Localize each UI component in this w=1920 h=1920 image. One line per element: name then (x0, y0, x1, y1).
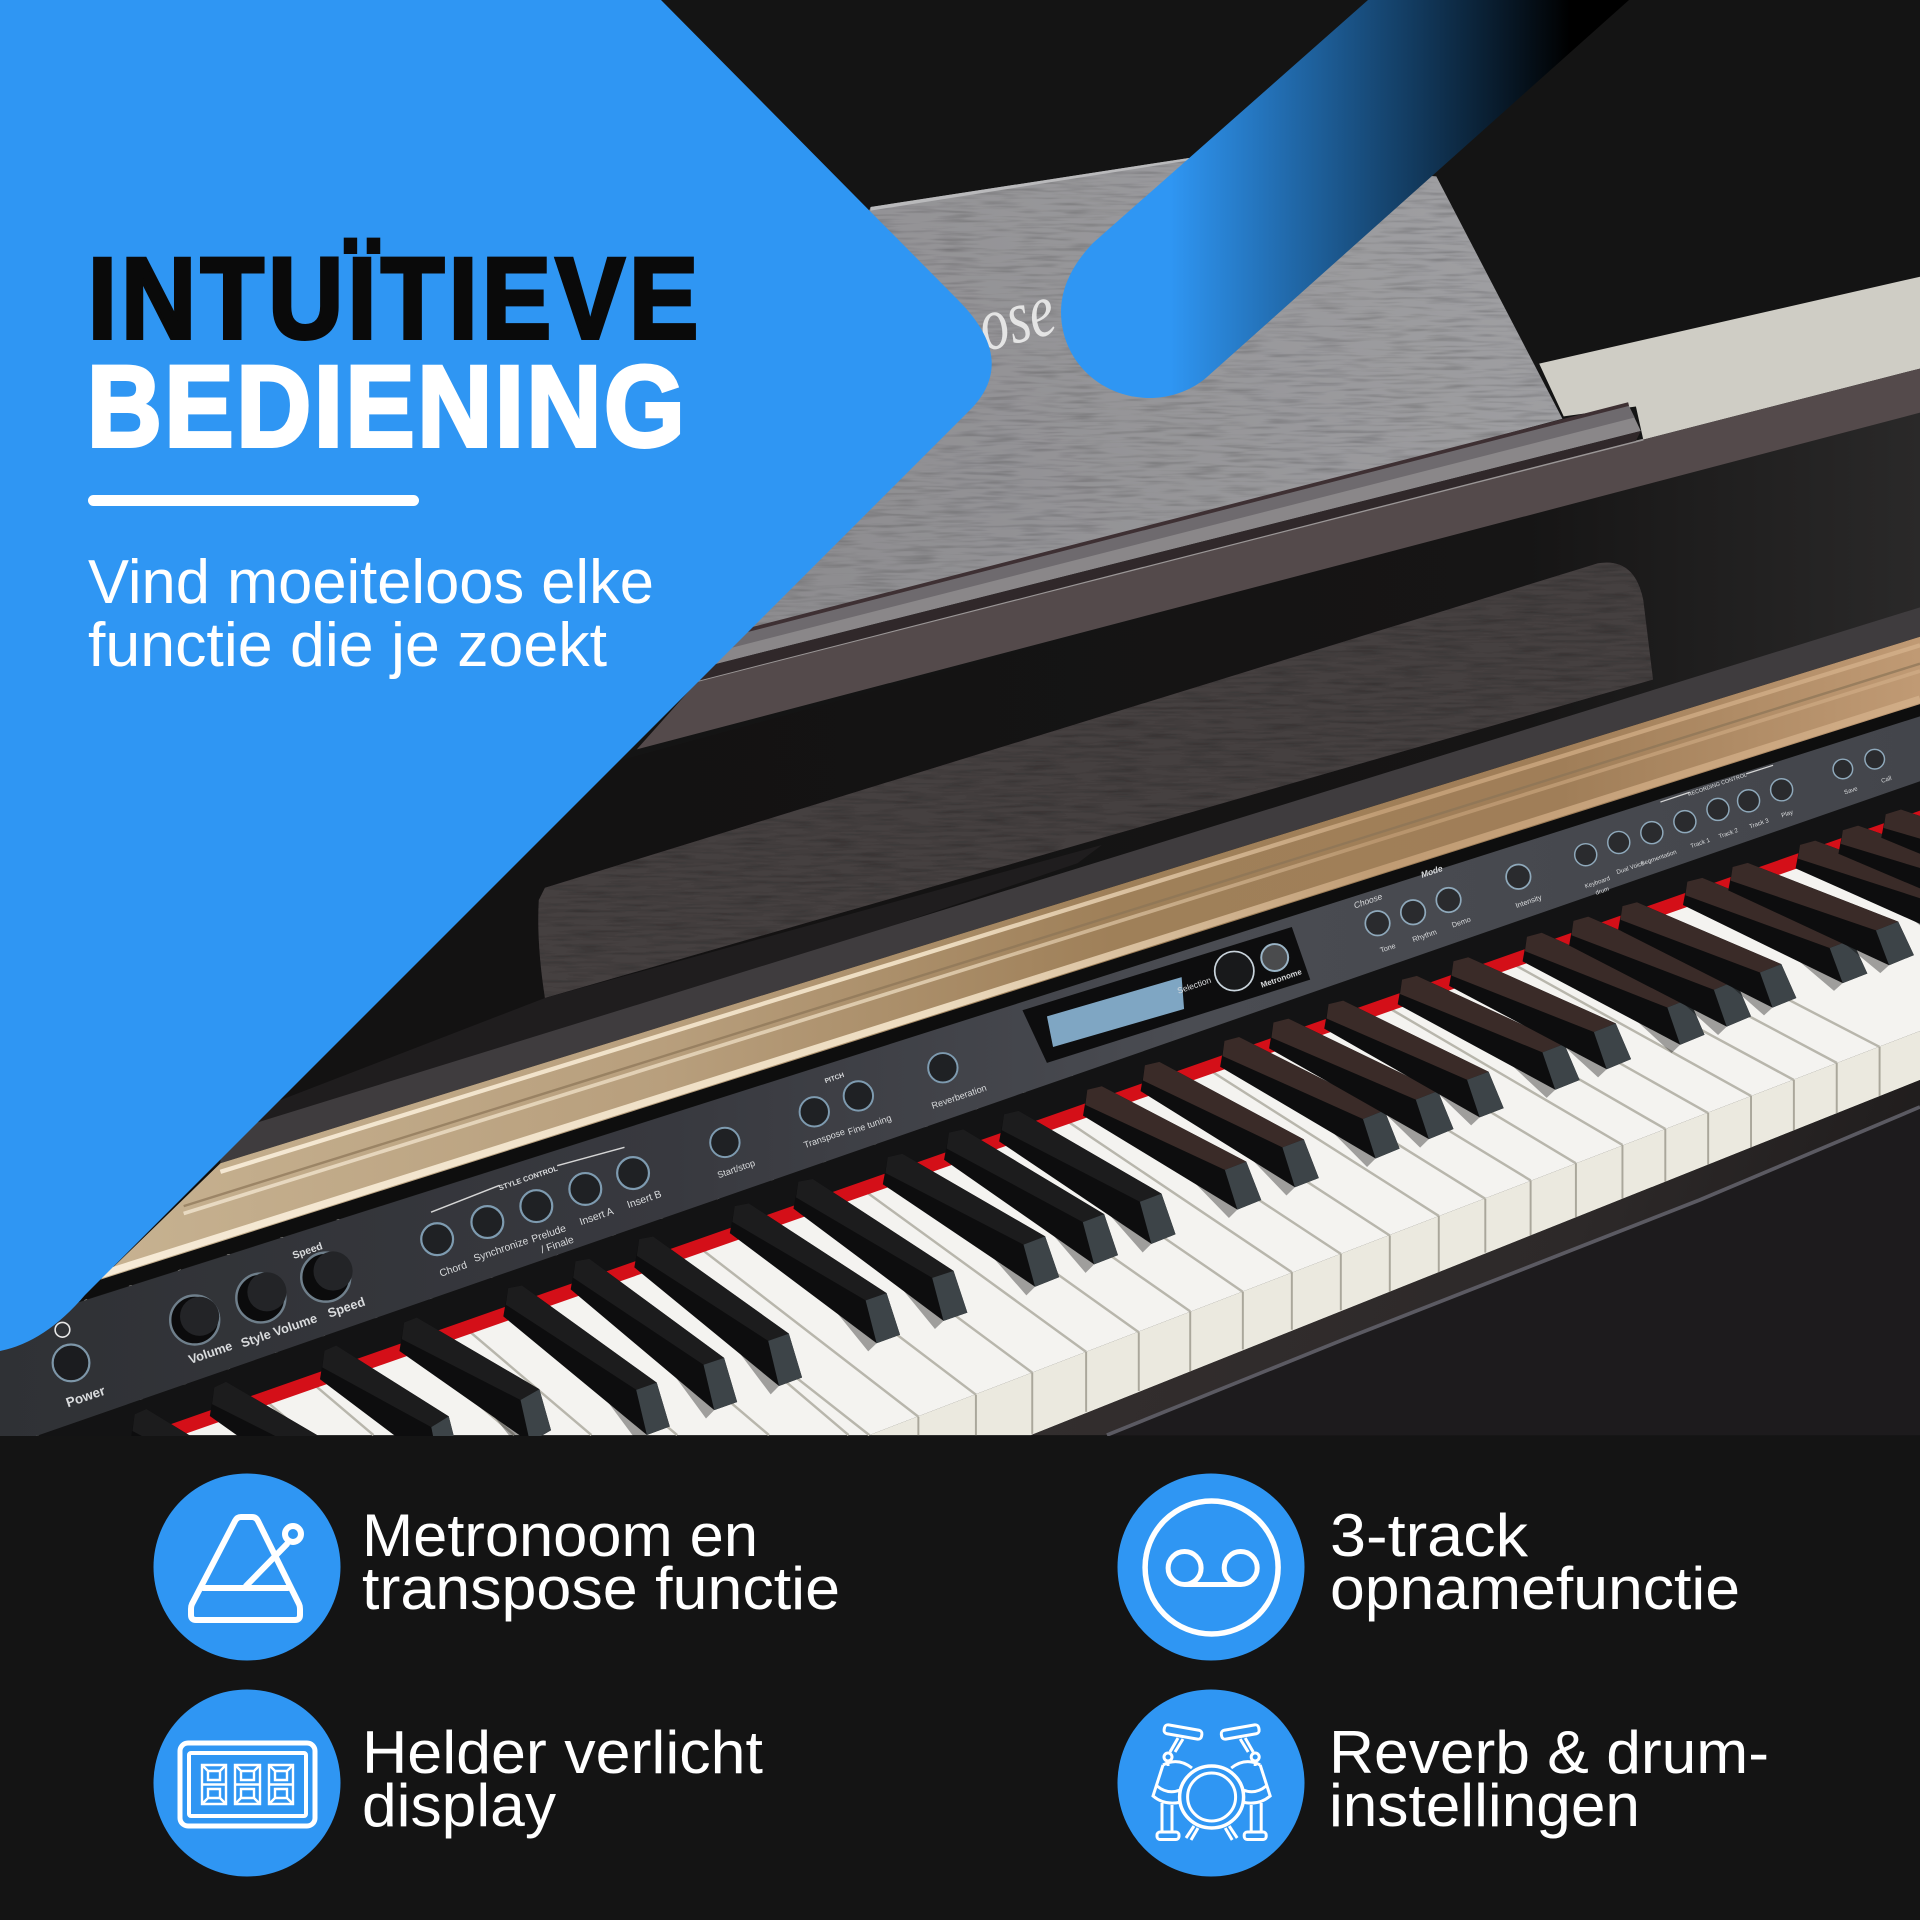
icon: LED display (154, 1690, 340, 1876)
feature text: recording (1330, 1501, 1740, 1622)
shadow strip (0, 781, 1920, 1487)
mode buttons: Intensity (1514, 893, 1543, 910)
feature text: drums: Reverb & drum- (1329, 1718, 1769, 1786)
logo text on music rest: ose (968, 266, 1063, 368)
recording buttons: drum (1595, 886, 1610, 897)
bottom features band (0, 1436, 1920, 1920)
left rotary knobs and power button (53, 1241, 367, 1410)
left rotary knobs and power button: Style Volume (239, 1310, 319, 1351)
recording buttons: Track 1 (1690, 837, 1712, 850)
mode buttons: Demo (1451, 915, 1472, 930)
left rotary knobs and power button: Speed (326, 1294, 367, 1321)
LCD display and selector (1022, 927, 1310, 1063)
title rule (88, 495, 419, 506)
music ledge (698, 404, 1641, 681)
style control buttons: Chord (438, 1260, 469, 1280)
style control buttons: Insert B (626, 1189, 663, 1211)
lower dark stripes (196, 845, 1102, 1157)
mode buttons: Choose (1352, 891, 1384, 910)
style control buttons: STYLE CONTROL (497, 1164, 559, 1192)
mode buttons: Mode (1419, 863, 1444, 880)
blue headline panel (0, 0, 992, 1351)
title: BEDIENING (87, 343, 685, 471)
recording buttons: Dual Voice (1616, 860, 1646, 876)
recording buttons: RECORDING CONTROL (1687, 772, 1748, 798)
recording buttons: Play (1781, 809, 1795, 819)
white key separators (0, 907, 1880, 1435)
mode buttons (1352, 863, 1543, 955)
subtitle: functie die je zoekt (88, 611, 607, 680)
gold trim (0, 637, 1920, 1327)
dark cavity below the ledge (171, 404, 1920, 1157)
recording buttons: Call (1880, 775, 1893, 785)
black keys (129, 788, 1920, 1559)
style control buttons: Synchronize (472, 1236, 530, 1265)
recording buttons: Track 3 (1748, 817, 1770, 830)
style control buttons (421, 1147, 663, 1280)
pitch and playback buttons (710, 1053, 988, 1180)
mode buttons: Tone (1379, 941, 1397, 955)
title (87, 235, 698, 471)
icon: tape recording (1118, 1474, 1304, 1660)
feature text: metronome: transpose functie (362, 1554, 840, 1622)
music rest (698, 158, 1562, 649)
feature: recording (1118, 1474, 1740, 1660)
style control buttons: Insert A (578, 1206, 615, 1228)
subtitle: Vind moeiteloos elke (88, 548, 654, 617)
feature: display (154, 1690, 763, 1876)
pitch and playback buttons: Fine tuning (847, 1113, 893, 1137)
feature text: display: Helder verlicht (362, 1718, 763, 1786)
feature text: drums (1329, 1718, 1769, 1839)
recording buttons (1575, 749, 1893, 897)
left rotary knobs and power button: Speed (291, 1241, 324, 1262)
cream top shelf (1539, 277, 1920, 440)
pitch and playback buttons: Start/stop (716, 1158, 756, 1180)
style control buttons: Prelude (530, 1223, 568, 1245)
feature text: recording: opnamefunctie (1330, 1554, 1740, 1622)
feature: drums (1118, 1690, 1769, 1876)
brown shelf strip (637, 369, 1920, 749)
feature text: display (362, 1718, 763, 1839)
feature text: metronome (362, 1501, 840, 1622)
recording buttons: Keyboard (1584, 875, 1611, 890)
mode buttons: Rhythm (1411, 927, 1438, 944)
red felt (0, 811, 1920, 1499)
LCD display and selector: Selection (1176, 975, 1213, 996)
feature text: metronome: Metronoom en (362, 1501, 758, 1569)
recording buttons: Segmentation (1640, 849, 1678, 868)
wooden key slip (1031, 1080, 1920, 1435)
piano photo (0, 158, 1920, 1559)
feature text: recording: 3-track (1330, 1501, 1529, 1569)
pitch and playback buttons: Transpose (802, 1127, 846, 1150)
title: INTUÏTIEVE (88, 235, 698, 363)
left rotary knobs and power button: Volume (186, 1338, 234, 1367)
left rotary knobs and power button: Power (64, 1383, 108, 1410)
white keys (0, 818, 1920, 1488)
feature: metronome (154, 1474, 840, 1660)
icon: metronome (154, 1474, 340, 1660)
recording buttons: Save (1843, 785, 1859, 796)
pitch and playback buttons: Reverberation (930, 1083, 988, 1111)
LCD display and selector: Metronome (1260, 967, 1303, 990)
front wooden board (538, 563, 1653, 998)
style control buttons: / Finale (540, 1235, 576, 1256)
subtitle (88, 548, 654, 680)
recording buttons: Track 2 (1718, 827, 1740, 840)
panel controls (53, 749, 1893, 1410)
control panel (0, 716, 1920, 1449)
grey rail (220, 607, 1920, 1163)
gradient stripe (1061, 0, 1629, 398)
pitch and playback buttons: PITCH (824, 1072, 845, 1085)
feature text: display: display (362, 1771, 557, 1839)
feature text: drums: instellingen (1329, 1771, 1640, 1839)
icon: drum kit (1118, 1690, 1304, 1876)
